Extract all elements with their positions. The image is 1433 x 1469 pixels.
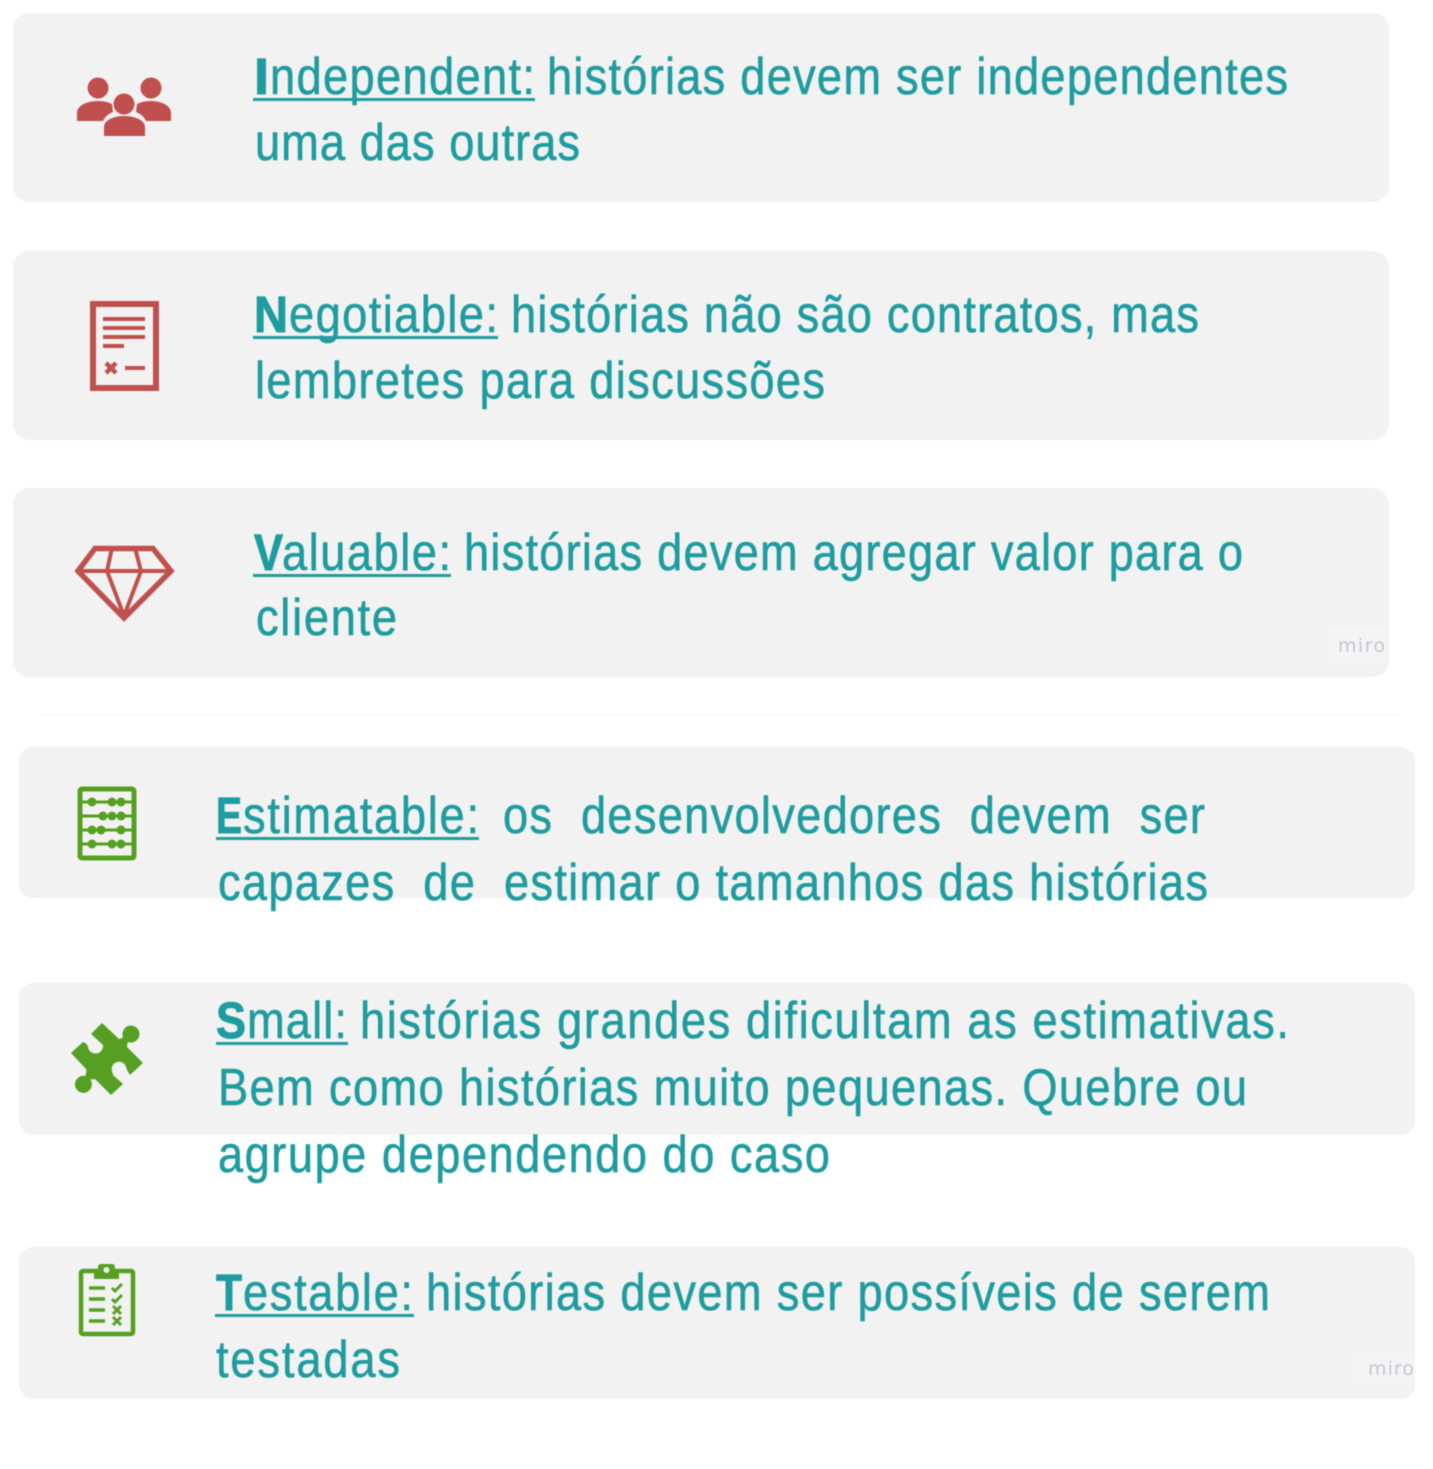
icon: puzzle piece	[71, 1023, 143, 1095]
panel: Negotiable	[13, 251, 1389, 440]
heading: Estimatable: E	[216, 787, 242, 844]
panel: Testable	[19, 1247, 1415, 1399]
heading: Negotiable: egotiable:	[289, 286, 498, 344]
heading: Valuable: aluable:	[282, 524, 451, 582]
description text: histórias não são contratos, mas	[511, 286, 1199, 344]
watermark: miro	[1358, 1352, 1415, 1385]
heading: Testable: estable:	[243, 1264, 413, 1322]
heading: Testable: T	[216, 1264, 242, 1321]
description text: histórias devem agregar valor para o	[464, 524, 1243, 582]
icon: abacus	[80, 789, 134, 858]
card background	[19, 1247, 1415, 1399]
description text	[218, 992, 1289, 1184]
description text	[218, 787, 1208, 912]
watermark: miro: miro	[1338, 635, 1385, 657]
panel: Independent	[13, 13, 1389, 202]
card background	[19, 983, 1415, 1135]
card background	[13, 488, 1389, 677]
description text: testadas	[216, 1331, 400, 1389]
description text	[256, 524, 1243, 647]
icon: document	[93, 304, 156, 388]
watermark: miro: miro	[1368, 1358, 1414, 1380]
heading: Independent: I	[254, 48, 269, 105]
heading: Small: mall:	[247, 992, 347, 1050]
description text: histórias devem ser possíveis de serem	[426, 1264, 1270, 1322]
description text: capazes de estimar o tamanhos das histórias	[218, 854, 1208, 912]
description text	[216, 1264, 1270, 1389]
description text: lembretes para discussões	[255, 352, 825, 410]
icon: diamond	[78, 548, 171, 618]
panel: Small	[19, 983, 1415, 1184]
description text: Bem como histórias muito pequenas. Quebre ou	[218, 1059, 1247, 1117]
card background	[13, 251, 1389, 440]
card background	[19, 747, 1415, 898]
description text: histórias devem ser independentes	[547, 48, 1288, 106]
heading: Independent: ndependent:	[270, 48, 535, 106]
description text	[255, 48, 1288, 172]
icon: checklist clipboard	[81, 1264, 133, 1334]
description text: cliente	[256, 589, 397, 647]
description text: histórias grandes dificultam as estimativas.	[360, 992, 1289, 1050]
heading: Estimatable: stimatable:	[243, 787, 479, 845]
heading: Negotiable: N	[254, 286, 288, 343]
description text	[255, 286, 1199, 410]
card background	[13, 13, 1389, 202]
description text: uma das outras	[255, 114, 580, 172]
description text: agrupe dependendo do caso	[218, 1126, 830, 1184]
panel: Valuable	[13, 488, 1389, 677]
description text: os desenvolvedores devem ser	[503, 787, 1205, 845]
heading: Small: S	[216, 992, 246, 1049]
icon: group of people	[77, 78, 171, 136]
watermark: miro	[1328, 628, 1385, 662]
panel: Estimatable	[19, 747, 1415, 912]
heading: Valuable: V	[254, 524, 283, 581]
